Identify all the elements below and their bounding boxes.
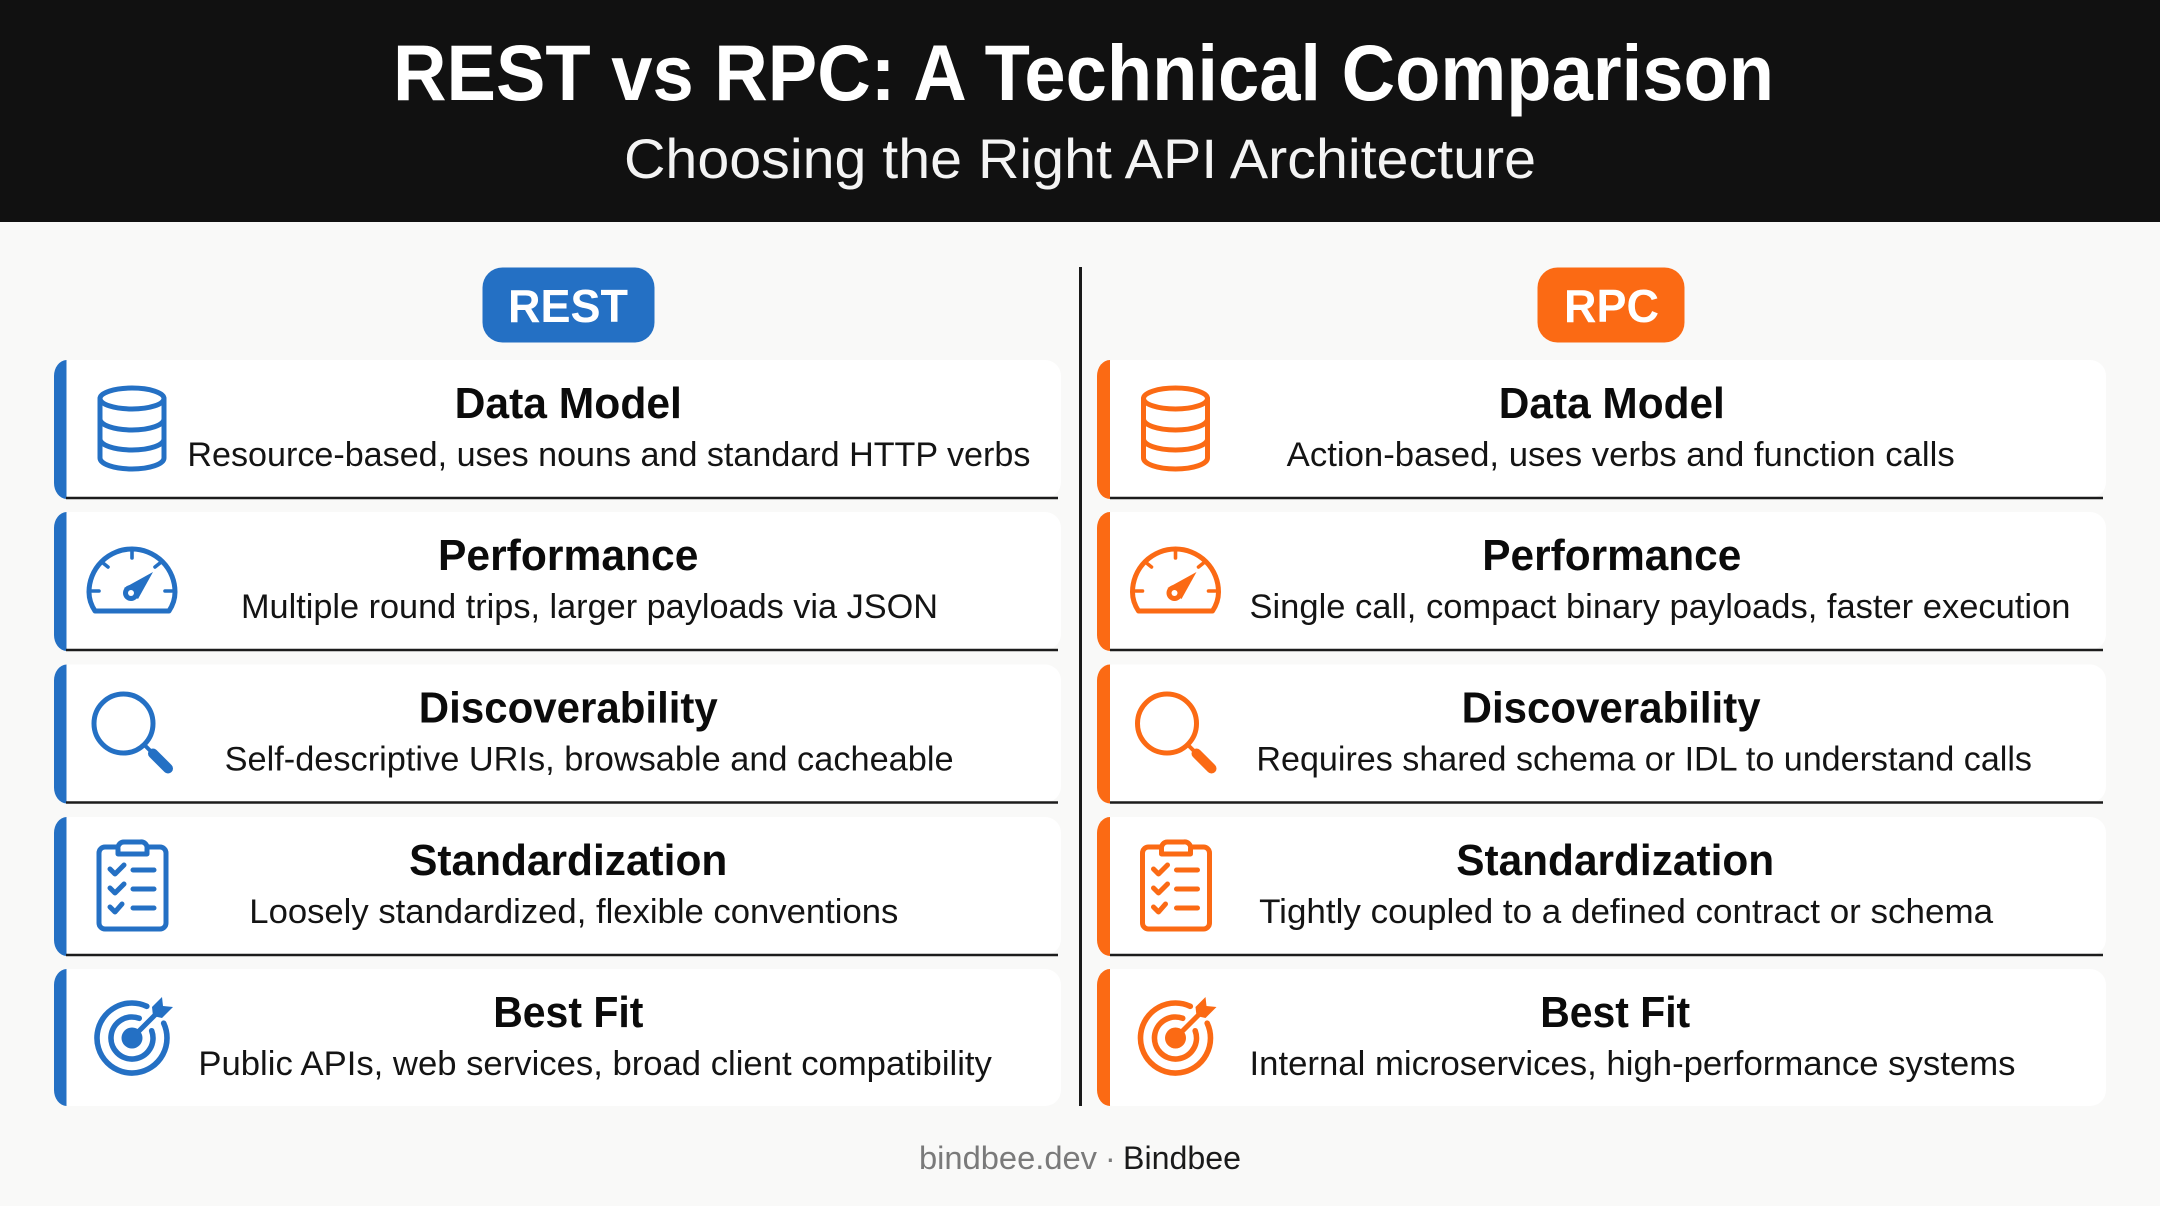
description: Multiple round trips, larger payloads via JSON bbox=[241, 588, 938, 626]
description: Tightly coupled to a defined contract or schema bbox=[1259, 893, 1993, 931]
heading: Standardization bbox=[409, 836, 727, 885]
description: Single call, compact binary payloads, faster execution bbox=[1250, 588, 2070, 626]
description: Requires shared schema or IDL to understand calls bbox=[1256, 740, 2032, 778]
description: Internal microservices, high-performance systems bbox=[1250, 1045, 2016, 1083]
icon: database bbox=[100, 388, 164, 469]
card: REST performance bbox=[54, 512, 1061, 651]
center divider bbox=[1079, 267, 1082, 1106]
card: RPC standardization bbox=[1097, 817, 2106, 956]
description: Loosely standardized, flexible conventions bbox=[249, 893, 898, 931]
icon: magnifier bbox=[94, 694, 168, 768]
card: RPC data model bbox=[1097, 360, 2106, 499]
description: Public APIs, web services, broad client compatibility bbox=[198, 1045, 992, 1083]
badge: REST: REST bbox=[508, 280, 628, 332]
header band bbox=[0, 0, 2160, 222]
badge: RPC: RPC bbox=[1564, 280, 1659, 332]
card: REST standardization bbox=[54, 817, 1061, 956]
heading: Performance bbox=[438, 531, 698, 580]
card: RPC best fit bbox=[1097, 969, 2106, 1106]
heading: Discoverability bbox=[419, 684, 718, 732]
heading: Best Fit bbox=[493, 988, 644, 1037]
description: Self-descriptive URIs, browsable and cacheable bbox=[225, 740, 954, 778]
icon: target bbox=[97, 997, 173, 1073]
icon: database bbox=[1144, 388, 1208, 469]
title: REST vs RPC: A Technical Comparison bbox=[393, 28, 1774, 117]
card: RPC discoverability bbox=[1097, 664, 2106, 804]
description: Action-based, uses verbs and function calls bbox=[1287, 436, 1955, 474]
heading: Performance bbox=[1482, 531, 1741, 580]
card: RPC performance bbox=[1097, 512, 2106, 651]
card: REST data model bbox=[54, 360, 1061, 499]
panel: RPC column bbox=[1097, 360, 2106, 1106]
footer bbox=[919, 1140, 1241, 1176]
subtitle: Choosing the Right API Architecture bbox=[624, 127, 1536, 190]
heading: Data Model bbox=[455, 379, 682, 428]
icon: clipboard bbox=[99, 842, 166, 929]
badge: REST bbox=[482, 268, 654, 342]
heading: Best Fit bbox=[1540, 988, 1691, 1037]
icon: gauge bbox=[1132, 549, 1218, 611]
icon: magnifier bbox=[1138, 694, 1212, 768]
description: Resource-based, uses nouns and standard HTTP verbs bbox=[187, 436, 1030, 474]
card: REST best fit bbox=[54, 969, 1061, 1106]
footer: bindbee.dev bbox=[919, 1140, 1097, 1176]
panel: REST column bbox=[54, 360, 1061, 1106]
badge: RPC bbox=[1538, 268, 1684, 342]
icon: gauge bbox=[89, 549, 175, 611]
footer: · bbox=[1105, 1140, 1116, 1176]
heading: Data Model bbox=[1499, 379, 1725, 428]
heading: Discoverability bbox=[1462, 684, 1761, 732]
heading: Standardization bbox=[1456, 836, 1774, 885]
card: REST discoverability bbox=[54, 664, 1061, 804]
icon: clipboard bbox=[1142, 842, 1210, 929]
footer: Bindbee bbox=[1123, 1140, 1241, 1176]
icon: target bbox=[1140, 997, 1216, 1073]
